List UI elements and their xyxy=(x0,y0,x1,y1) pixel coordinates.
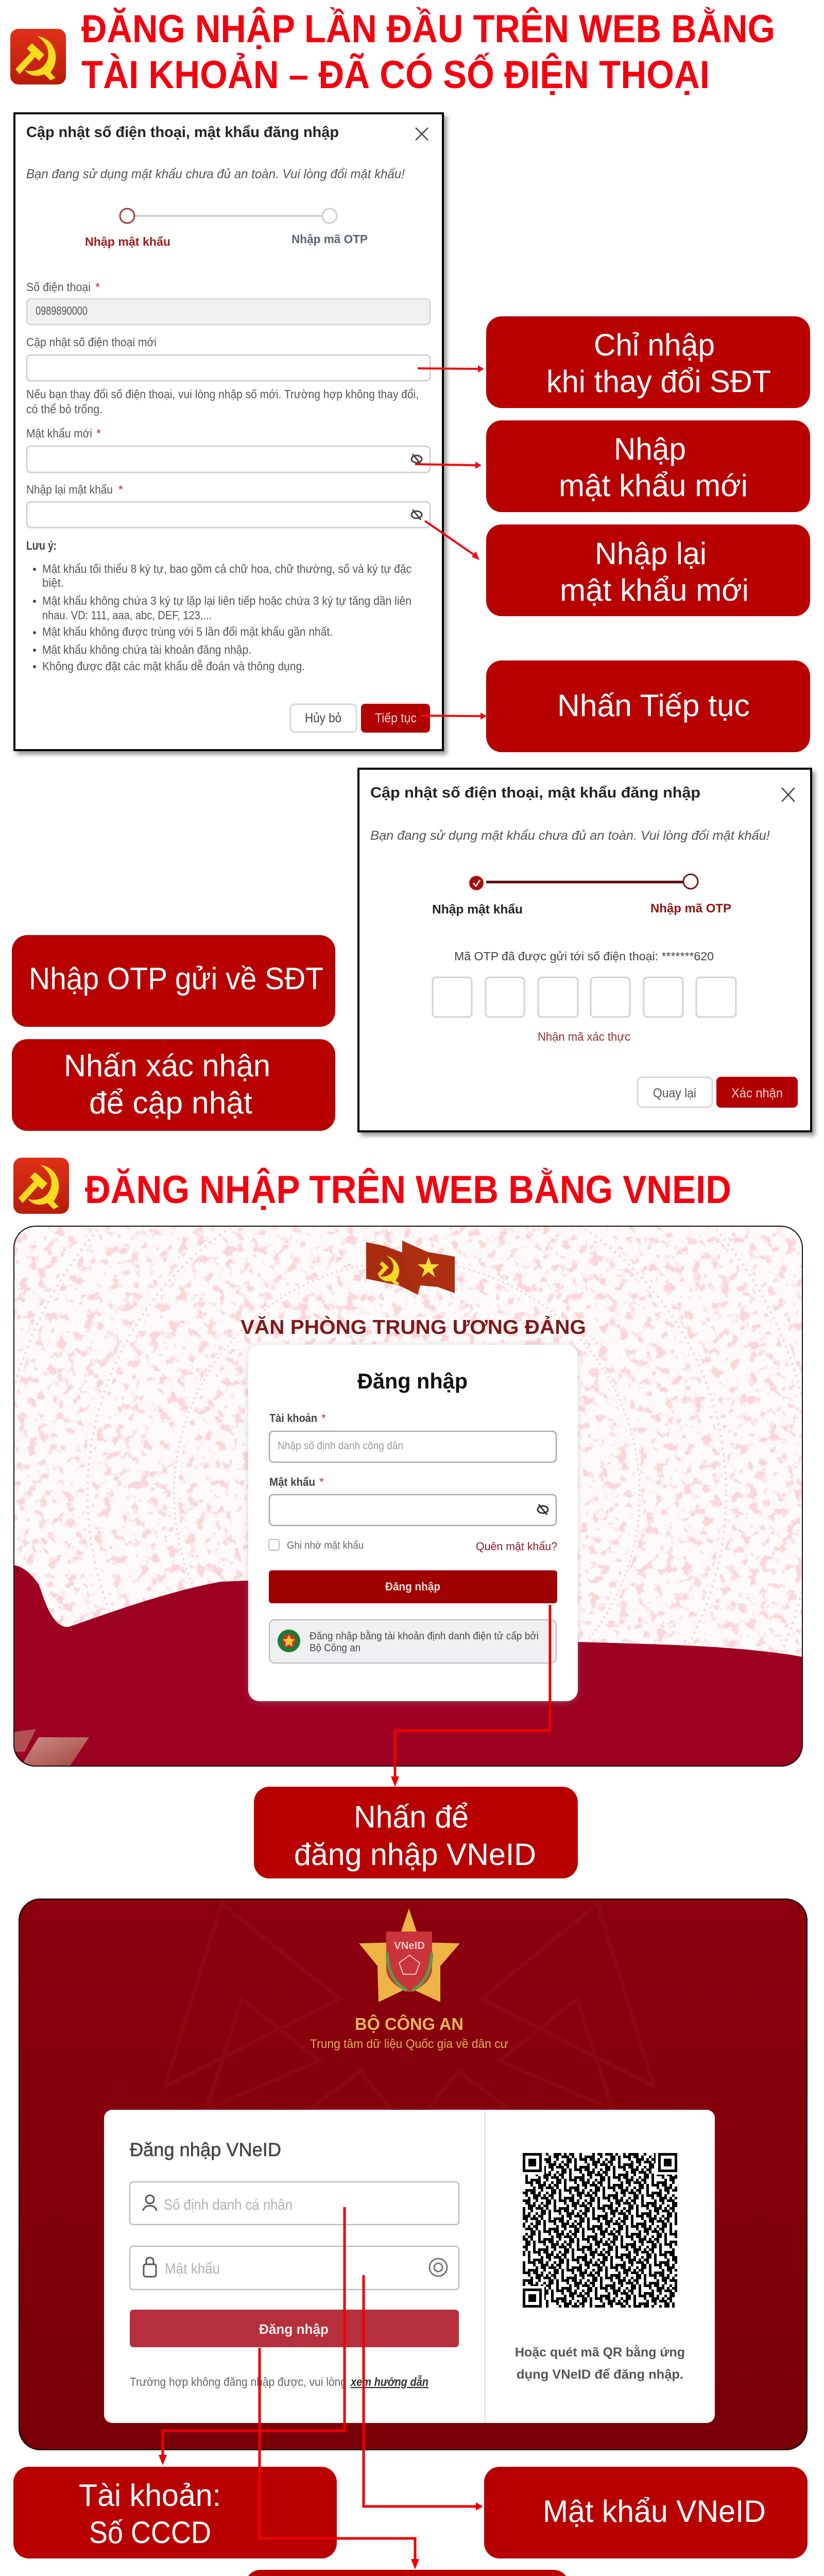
arrow: to continue callout xyxy=(420,713,487,720)
callout: press confirm: để cập nhật xyxy=(89,1086,252,1120)
callout: re-enter new password: mật khẩu mới xyxy=(560,573,749,607)
QR code xyxy=(523,2153,677,2308)
notes: Mật khẩu không được trùng với 5 lần đổi mật khẩu gần nhất. xyxy=(42,625,333,638)
new phone field: Nếu bạn thay đổi số điện thoại, vui lòng nhập số mới. Trường hợp không thay đổi, xyxy=(26,387,419,401)
OTP inputs xyxy=(433,977,736,1017)
password input: Mật khẩu xyxy=(165,2261,220,2277)
warning text: Bạn đang sử dụng mật khẩu chưa đủ an toàn. Vui lòng đổi mật khẩu! xyxy=(26,167,405,181)
VNeID login button: Bộ Công an xyxy=(310,1642,360,1654)
QR caption: dụng VNeID để đăng nhập. xyxy=(517,2367,683,2382)
callout: VNeID password xyxy=(484,2467,808,2558)
callout: only enter when changing phone: Chỉ nhập xyxy=(594,328,715,362)
login card xyxy=(104,2110,715,2423)
icon: close xyxy=(782,788,795,802)
callout: press to log in VNeID: Nhấn để xyxy=(354,1800,469,1834)
confirm button xyxy=(716,1077,798,1108)
callout: press continue xyxy=(486,660,810,752)
repeat password field: Nhập lại mật khẩu xyxy=(26,483,113,496)
account field xyxy=(269,1412,556,1462)
cancel button xyxy=(290,704,356,732)
callout: enter new password: mật khẩu mới xyxy=(559,468,748,503)
notes: Mật khẩu không chứa tài khoản đăng nhập. xyxy=(42,643,251,656)
icon: close xyxy=(416,128,428,140)
VNeID login button: Đăng nhập bằng tài khoản định danh điện tử cấp bởi xyxy=(310,1630,539,1642)
panel: OTP dialog xyxy=(358,769,811,1131)
callout: only enter when changing phone: khi thay đổi SĐT xyxy=(546,364,771,399)
arrow: login to callout xyxy=(260,2348,419,2569)
red wave xyxy=(13,1565,803,1767)
stepper: Nhập mật khẩu xyxy=(432,903,523,917)
new password field xyxy=(26,427,430,472)
callout: enter OTP xyxy=(12,935,335,1027)
callout: re-enter new password xyxy=(486,524,810,616)
icon: party emblem top xyxy=(10,29,66,84)
continue button: Tiếp tục xyxy=(375,711,417,725)
heading: VNeID login section: ĐĂNG NHẬP TRÊN WEB BẰNG VNEID xyxy=(85,1167,731,1212)
stepper: Nhập mã OTP xyxy=(291,232,368,246)
QR caption xyxy=(515,2344,685,2382)
password input xyxy=(130,2246,459,2290)
QR caption: Hoặc quét mã QR bằng ứng xyxy=(515,2344,685,2360)
stepper xyxy=(85,209,368,248)
arrow: to new password callout xyxy=(415,462,482,469)
login button: Đăng nhập xyxy=(259,2321,329,2337)
callout: VNeID password: Mật khẩu VNeID xyxy=(543,2494,766,2529)
callout: press continue: Nhấn Tiếp tục xyxy=(557,688,750,723)
back button xyxy=(638,1077,712,1107)
ministry name: BỘ CÔNG AN xyxy=(355,2014,464,2033)
phone field xyxy=(26,280,430,325)
login button: Đăng nhập xyxy=(385,1580,440,1593)
icon: party emblem second xyxy=(13,1158,69,1214)
panel: party office login page xyxy=(13,1226,803,1767)
remember me: Ghi nhớ mật khẩu xyxy=(287,1540,364,1551)
notes: Lưu ý: xyxy=(26,539,57,553)
new password field: Mật khẩu mới xyxy=(26,427,92,440)
OTP message: Mã OTP đã được gửi tới số điện thoại: *******620 xyxy=(454,950,714,963)
account input: Số định danh cá nhân xyxy=(164,2197,293,2213)
back button: Quay lại xyxy=(653,1086,696,1100)
organisation title: VĂN PHÒNG TRUNG ƯƠNG ĐẢNG xyxy=(241,1316,586,1338)
panel: VNeID login page xyxy=(19,1899,808,2450)
stepper: Nhập mật khẩu xyxy=(85,235,170,248)
icon: party flags xyxy=(366,1241,455,1295)
account input xyxy=(130,2182,459,2225)
phone field: Số điện thoại xyxy=(26,280,91,294)
VNeID login button xyxy=(269,1620,556,1663)
heading: first login section: TÀI KHOẢN – ĐÃ CÓ SỐ ĐIỆN THOẠI xyxy=(81,53,710,97)
dialog title: Cập nhật số điện thoại, mật khẩu đăng nhập xyxy=(26,124,339,141)
help text: Trường hợp không đăng nhập được, vui lòng xyxy=(130,2375,347,2388)
resend link: Nhận mã xác thực xyxy=(538,1030,630,1043)
warning text: Bạn đang sử dụng mật khẩu chưa đủ an toàn. Vui lòng đổi mật khẩu! xyxy=(370,828,770,843)
notes: Mật khẩu tối thiểu 8 ký tự, bao gồm cả chữ hoa, chữ thường, số và ký tự đặc xyxy=(42,562,411,575)
arrow: to re-enter callout xyxy=(425,521,479,560)
callout: account CCCD: Tài khoản: xyxy=(79,2478,221,2513)
callout: account CCCD: Số CCCD xyxy=(89,2515,211,2550)
callout: press to log in VNeID xyxy=(254,1787,578,1878)
notes xyxy=(26,539,411,673)
phone field: 0989890000 xyxy=(36,304,88,317)
forgot password: Quên mật khẩu? xyxy=(476,1540,557,1553)
continue button xyxy=(361,704,430,733)
ministry subtitle: Trung tâm dữ liệu Quốc gia về dân cư xyxy=(310,2037,508,2051)
repeat password field: * xyxy=(118,483,123,496)
notes: Không được đặt các mật khẩu dễ đoán và thông dụng. xyxy=(42,659,305,673)
notes: Mật khẩu không chứa 3 ký tự lặp lại liên tiếp hoặc chứa 3 ký tự tăng dần liên xyxy=(42,594,411,607)
password field: Mật khẩu xyxy=(269,1476,315,1488)
arrow: account to callout xyxy=(159,2207,345,2465)
callout: enter new password: Nhập xyxy=(614,432,686,466)
password field xyxy=(269,1476,556,1526)
callout: press to login xyxy=(245,2570,569,2576)
callout: enter new password xyxy=(486,420,810,512)
callout: press confirm xyxy=(12,1039,335,1131)
confirm button: Xác nhận xyxy=(731,1086,783,1100)
callout: only enter when changing phone xyxy=(486,316,810,408)
stepper xyxy=(432,874,731,917)
heading: first login section xyxy=(81,7,775,97)
notes: biệt. xyxy=(42,576,64,589)
new phone field xyxy=(26,335,430,416)
phone field: * xyxy=(95,280,100,294)
stepper: Nhập mã OTP xyxy=(650,902,731,916)
arrow: password to callout xyxy=(364,2275,483,2511)
account field: * xyxy=(321,1412,326,1425)
login button xyxy=(130,2310,459,2347)
card title: Đăng nhập VNeID xyxy=(130,2139,281,2160)
callout: enter OTP: Nhập OTP gửi về SĐT xyxy=(29,961,323,996)
login button xyxy=(269,1570,557,1603)
password field: * xyxy=(319,1476,324,1488)
dialog title: Cập nhật số điện thoại, mật khẩu đăng nhập xyxy=(370,785,700,801)
notes: nhau. VD: 111, aaa, abc, DEF, 123,... xyxy=(42,608,212,622)
icon: public security star xyxy=(359,1908,460,2002)
callout: account CCCD xyxy=(13,2467,337,2558)
arrow: to phone callout xyxy=(418,365,484,372)
card title: Đăng nhập xyxy=(357,1369,468,1393)
callout: re-enter new password: Nhập lại xyxy=(595,536,707,571)
account field: Tài khoản xyxy=(269,1412,317,1425)
icon: public security star: VNeID xyxy=(394,1940,425,1952)
callout: press to log in VNeID: đăng nhập VNeID xyxy=(294,1837,536,1872)
account field: Nhập số định danh công dân xyxy=(278,1440,403,1452)
new phone field: có thể bỏ trống. xyxy=(26,402,102,416)
arrow: to VNeID login callout xyxy=(391,1605,550,1787)
cancel button: Hủy bỏ xyxy=(305,711,341,725)
callout: press confirm: Nhấn xác nhận xyxy=(64,1048,270,1083)
login card xyxy=(248,1345,578,1701)
new phone field: Cập nhật số điện thoại mới xyxy=(26,335,157,349)
repeat password field xyxy=(26,483,430,528)
new password field: * xyxy=(96,427,101,440)
help text: xem hướng dẫn xyxy=(350,2375,428,2388)
panel: password update dialog xyxy=(14,113,443,750)
